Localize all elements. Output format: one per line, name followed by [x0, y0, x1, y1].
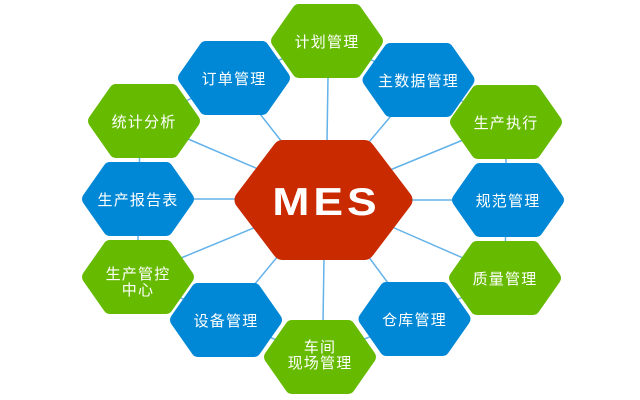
hexagon: 设备管理: [177, 290, 275, 350]
hexagon: 质量管理: [456, 248, 554, 308]
hexagon: 仓库管理: [366, 289, 464, 349]
hexagon: 生产报告表: 生产报告表: [97, 192, 179, 209]
hexagon: 主数据管理: [370, 50, 468, 110]
hexagon: 生产管控中心: [89, 247, 187, 307]
hexagon: 车间现场管理: [271, 327, 369, 387]
hexagon: 生产管控中心: 生产管控: [106, 266, 170, 283]
hexagon: 规范管理: 规范管理: [476, 193, 540, 210]
hexagon: 车间现场管理: 现场管理: [288, 355, 352, 372]
hexagon: 生产执行: [457, 92, 555, 152]
hexagon: 主数据管理: 主数据管理: [378, 73, 459, 90]
hexagon: 订单管理: [185, 48, 283, 108]
hexagon: 生产报告表: [89, 169, 187, 229]
hexagon: 仓库管理: 仓库管理: [382, 312, 447, 329]
hexagon: 生产管控中心: 中心: [122, 282, 154, 299]
connector lines: [138, 41, 506, 357]
hexagon: 订单管理: 订单管理: [202, 71, 266, 88]
hexagon: 统计分析: [95, 91, 193, 151]
hexagon: 规范管理: [459, 170, 557, 230]
hexagon: 统计分析: 统计分析: [112, 114, 176, 131]
hexagon: 计划管理: 计划管理: [295, 34, 359, 51]
hexagon: MES core: MES: [272, 180, 381, 223]
hexagon: 计划管理: [278, 11, 376, 71]
hexagon: 设备管理: 设备管理: [194, 313, 258, 330]
hexagon: 质量管理: 质量管理: [473, 271, 537, 288]
hexagon: 生产执行: 生产执行: [474, 115, 538, 132]
hexagon: MES core: [244, 150, 402, 250]
hexagon: 车间现场管理: 车间: [304, 339, 336, 356]
